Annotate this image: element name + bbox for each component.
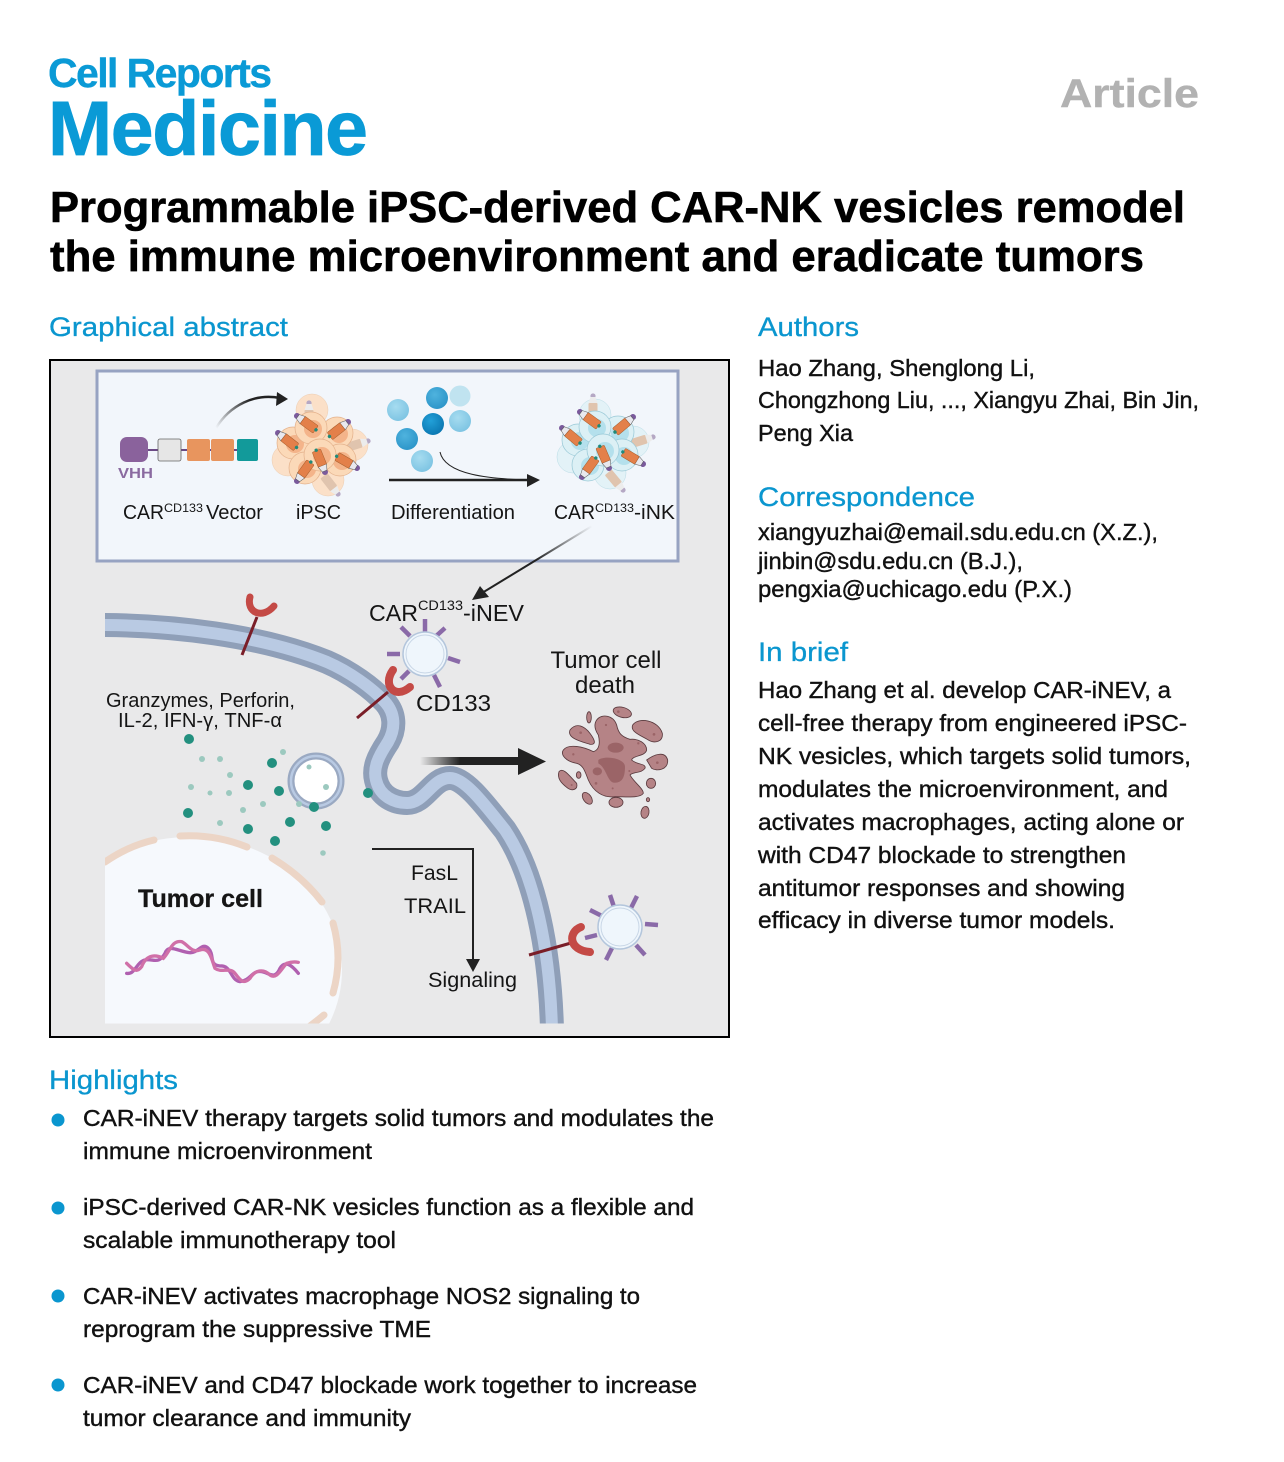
correspondence text: xiangyuzhai@email.sdu.edu.cn (X.Z.), [758, 519, 1158, 545]
title: Programmable iPSC-derived CAR-NK vesicles remodel [50, 183, 1185, 232]
production step labels: -iNK [634, 502, 676, 524]
cytotoxic granule dots [183, 734, 373, 856]
in brief text: Hao Zhang et al. develop CAR-iNEV, a [758, 677, 1171, 703]
heading: highlights: Highlights [49, 1065, 178, 1095]
in brief text [757, 677, 1191, 933]
highlight 1: immune microenvironment [83, 1138, 373, 1164]
highlights list [52, 1105, 714, 1431]
production step labels: CD133 [595, 501, 634, 515]
highlight 1 [52, 1105, 714, 1164]
receptor: top [242, 597, 274, 655]
labels: death ligands: FasL [411, 862, 458, 885]
highlight 3: reprogram the suppressive TME [83, 1316, 431, 1342]
icon: iPSC cluster [272, 394, 372, 499]
title [50, 183, 1185, 281]
highlight 3 [52, 1283, 640, 1342]
heading: authors: Authors [758, 312, 859, 342]
label: CAR-iNEV: CD133 [418, 597, 463, 613]
title: the immune microenvironment and eradicate tumors [50, 232, 1144, 281]
label: cytokines: Granzymes, Perforin, [106, 690, 295, 712]
in brief text: antitumor responses and showing [758, 875, 1125, 901]
label: tumor cell death: Tumor cell [550, 647, 662, 674]
production step labels: CD133 [164, 501, 203, 515]
icon: differentiating cells [387, 386, 471, 472]
icon: CAR-iNK cluster [557, 393, 657, 495]
panel: CAR-iNK production [97, 371, 678, 561]
production step labels: Differentiation [391, 502, 515, 524]
tumor cell [105, 832, 342, 1024]
highlight 4: tumor clearance and immunity [83, 1405, 412, 1431]
highlight 1: CAR-iNEV therapy targets solid tumors and modulates the [83, 1105, 714, 1131]
arrow: FasL TRAIL signaling [372, 849, 480, 972]
highlight 4 [52, 1372, 697, 1431]
production step labels: Vector [206, 502, 263, 524]
vesicle: lower right [585, 895, 658, 960]
highlight 2 [52, 1194, 694, 1253]
highlight 3: CAR-iNEV activates macrophage NOS2 signaling to [83, 1283, 640, 1309]
highlight 4: CAR-iNEV and CD47 blockade work together to increase [83, 1372, 697, 1398]
vesicle: releasing cargo [291, 756, 341, 806]
in brief text: with CD47 blockade to strengthen [757, 842, 1126, 868]
icon: dying tumor cell [558, 705, 668, 819]
production step labels: iPSC [296, 502, 341, 524]
highlight 2: iPSC-derived CAR-NK vesicles function as a flexible and [83, 1194, 694, 1220]
heading: graphical abstract: Graphical abstract [49, 312, 289, 342]
journal logo: Cell Reports [48, 50, 272, 96]
arrow: differentiation [389, 452, 540, 487]
production step labels [123, 501, 676, 524]
production step labels: CAR [554, 502, 595, 524]
labels: death ligands: Signaling [428, 969, 517, 992]
highlight 2: scalable immunotherapy tool [83, 1227, 396, 1253]
label: tumor cell death: death [575, 672, 635, 699]
in brief text: modulates the microenvironment, and [758, 776, 1168, 802]
label: tumor cell: Tumor cell [138, 885, 263, 913]
label: CAR-iNEV: -iNEV [463, 600, 525, 626]
journal logo: Medicine [48, 86, 368, 172]
label: cytokines [106, 690, 295, 732]
label: CAR-iNEV: CAR [369, 600, 418, 626]
label: CAR-iNEV [369, 597, 525, 626]
cell membrane [100, 625, 552, 1030]
in brief text: NK vesicles, which targets solid tumors, [758, 743, 1191, 769]
label: tumor cell death [550, 647, 662, 699]
correspondence text: jinbin@sdu.edu.cn (B.J.), [757, 548, 1023, 574]
correspondence text: pengxia@uchicago.edu (P.X.) [758, 576, 1072, 602]
graphical abstract panel [38, 360, 729, 1103]
label: CD133: CD133 [416, 690, 491, 716]
authors text: Chongzhong Liu, ..., Xiangyu Zhai, Bin Jin, [758, 387, 1199, 413]
arrow: iNK to iNEV [472, 526, 592, 600]
vesicle: CAR-iNEV [387, 619, 460, 687]
icon: DNA strand [127, 942, 298, 982]
production step labels: CAR [123, 502, 164, 524]
labels: death ligands: TRAIL [404, 895, 466, 918]
correspondence text [757, 519, 1158, 602]
receptor: lower right [529, 927, 590, 955]
authors text: Peng Xia [758, 420, 853, 446]
arrow: to tumor cell death [420, 748, 546, 775]
heading: in brief: In brief [758, 637, 849, 667]
in brief text: cell-free therapy from engineered iPSC- [758, 710, 1187, 736]
icon: CAR vector construct [118, 437, 258, 482]
article label: Article [1060, 72, 1199, 116]
arrow: vector to iPSC [216, 392, 288, 428]
receptor: bound to iNEV [357, 670, 410, 718]
label: cytokines: IL-2, IFN-γ, TNF-α [118, 710, 282, 732]
authors text [758, 355, 1199, 446]
heading: correspondence: Correspondence [758, 482, 975, 512]
in brief text: activates macrophages, acting alone or [758, 809, 1184, 835]
authors text: Hao Zhang, Shenglong Li, [758, 355, 1035, 381]
labels: death ligands [404, 862, 517, 992]
in brief text: efficacy in diverse tumor models. [758, 907, 1115, 933]
icon: CAR vector construct: VHH [118, 465, 153, 482]
